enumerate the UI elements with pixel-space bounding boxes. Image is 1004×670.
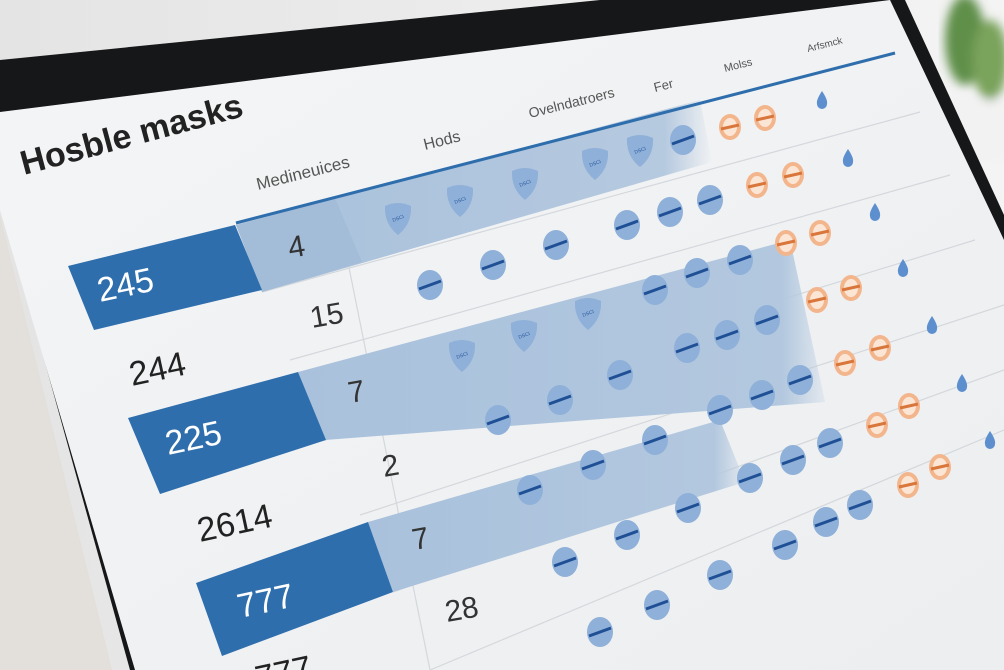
- header blue line: [236, 53, 895, 223]
- shaded band: row 4: [236, 100, 712, 292]
- second column numbers: 15: [307, 297, 346, 335]
- left numbers: 244: [126, 345, 189, 394]
- blue number boxes: [68, 225, 393, 656]
- dots row 6: [587, 431, 995, 647]
- second column numbers: 4: [285, 229, 308, 265]
- column headers: Arfsmck: [806, 35, 845, 55]
- left numbers: 225: [162, 414, 225, 463]
- dots row 3: [485, 259, 908, 435]
- left numbers: 245: [94, 261, 157, 310]
- second column numbers: 7: [345, 374, 368, 410]
- left numbers: [94, 261, 315, 670]
- shaded band: row 7: [298, 240, 825, 440]
- title: Hosble masks: [16, 87, 247, 183]
- second column numbers: 7: [409, 521, 432, 557]
- second column numbers: [285, 229, 481, 629]
- dots row 5: [552, 374, 967, 577]
- row divider lines: [262, 112, 1004, 670]
- dots row 4: [517, 316, 937, 505]
- column headers: Fer: [652, 75, 675, 95]
- left numbers: 2614: [194, 497, 276, 550]
- dots row 1: [417, 149, 853, 300]
- left desk: [0, 215, 112, 670]
- dots row 0: [385, 91, 827, 235]
- column headers: Medineuices: [254, 152, 352, 194]
- column headers: [254, 35, 845, 194]
- column headers: Hods: [422, 128, 462, 154]
- plant decoration: [945, 0, 1004, 160]
- second column numbers: 28: [442, 591, 481, 629]
- second column numbers: 2: [379, 448, 402, 484]
- left numbers: 777: [234, 577, 297, 626]
- column headers: Ovelndatroers: [527, 84, 616, 121]
- shaded band: lower row 7: [368, 420, 745, 592]
- dots row 2: [449, 203, 880, 372]
- column headers: Molss: [723, 56, 754, 75]
- cell shading darker: [236, 198, 362, 292]
